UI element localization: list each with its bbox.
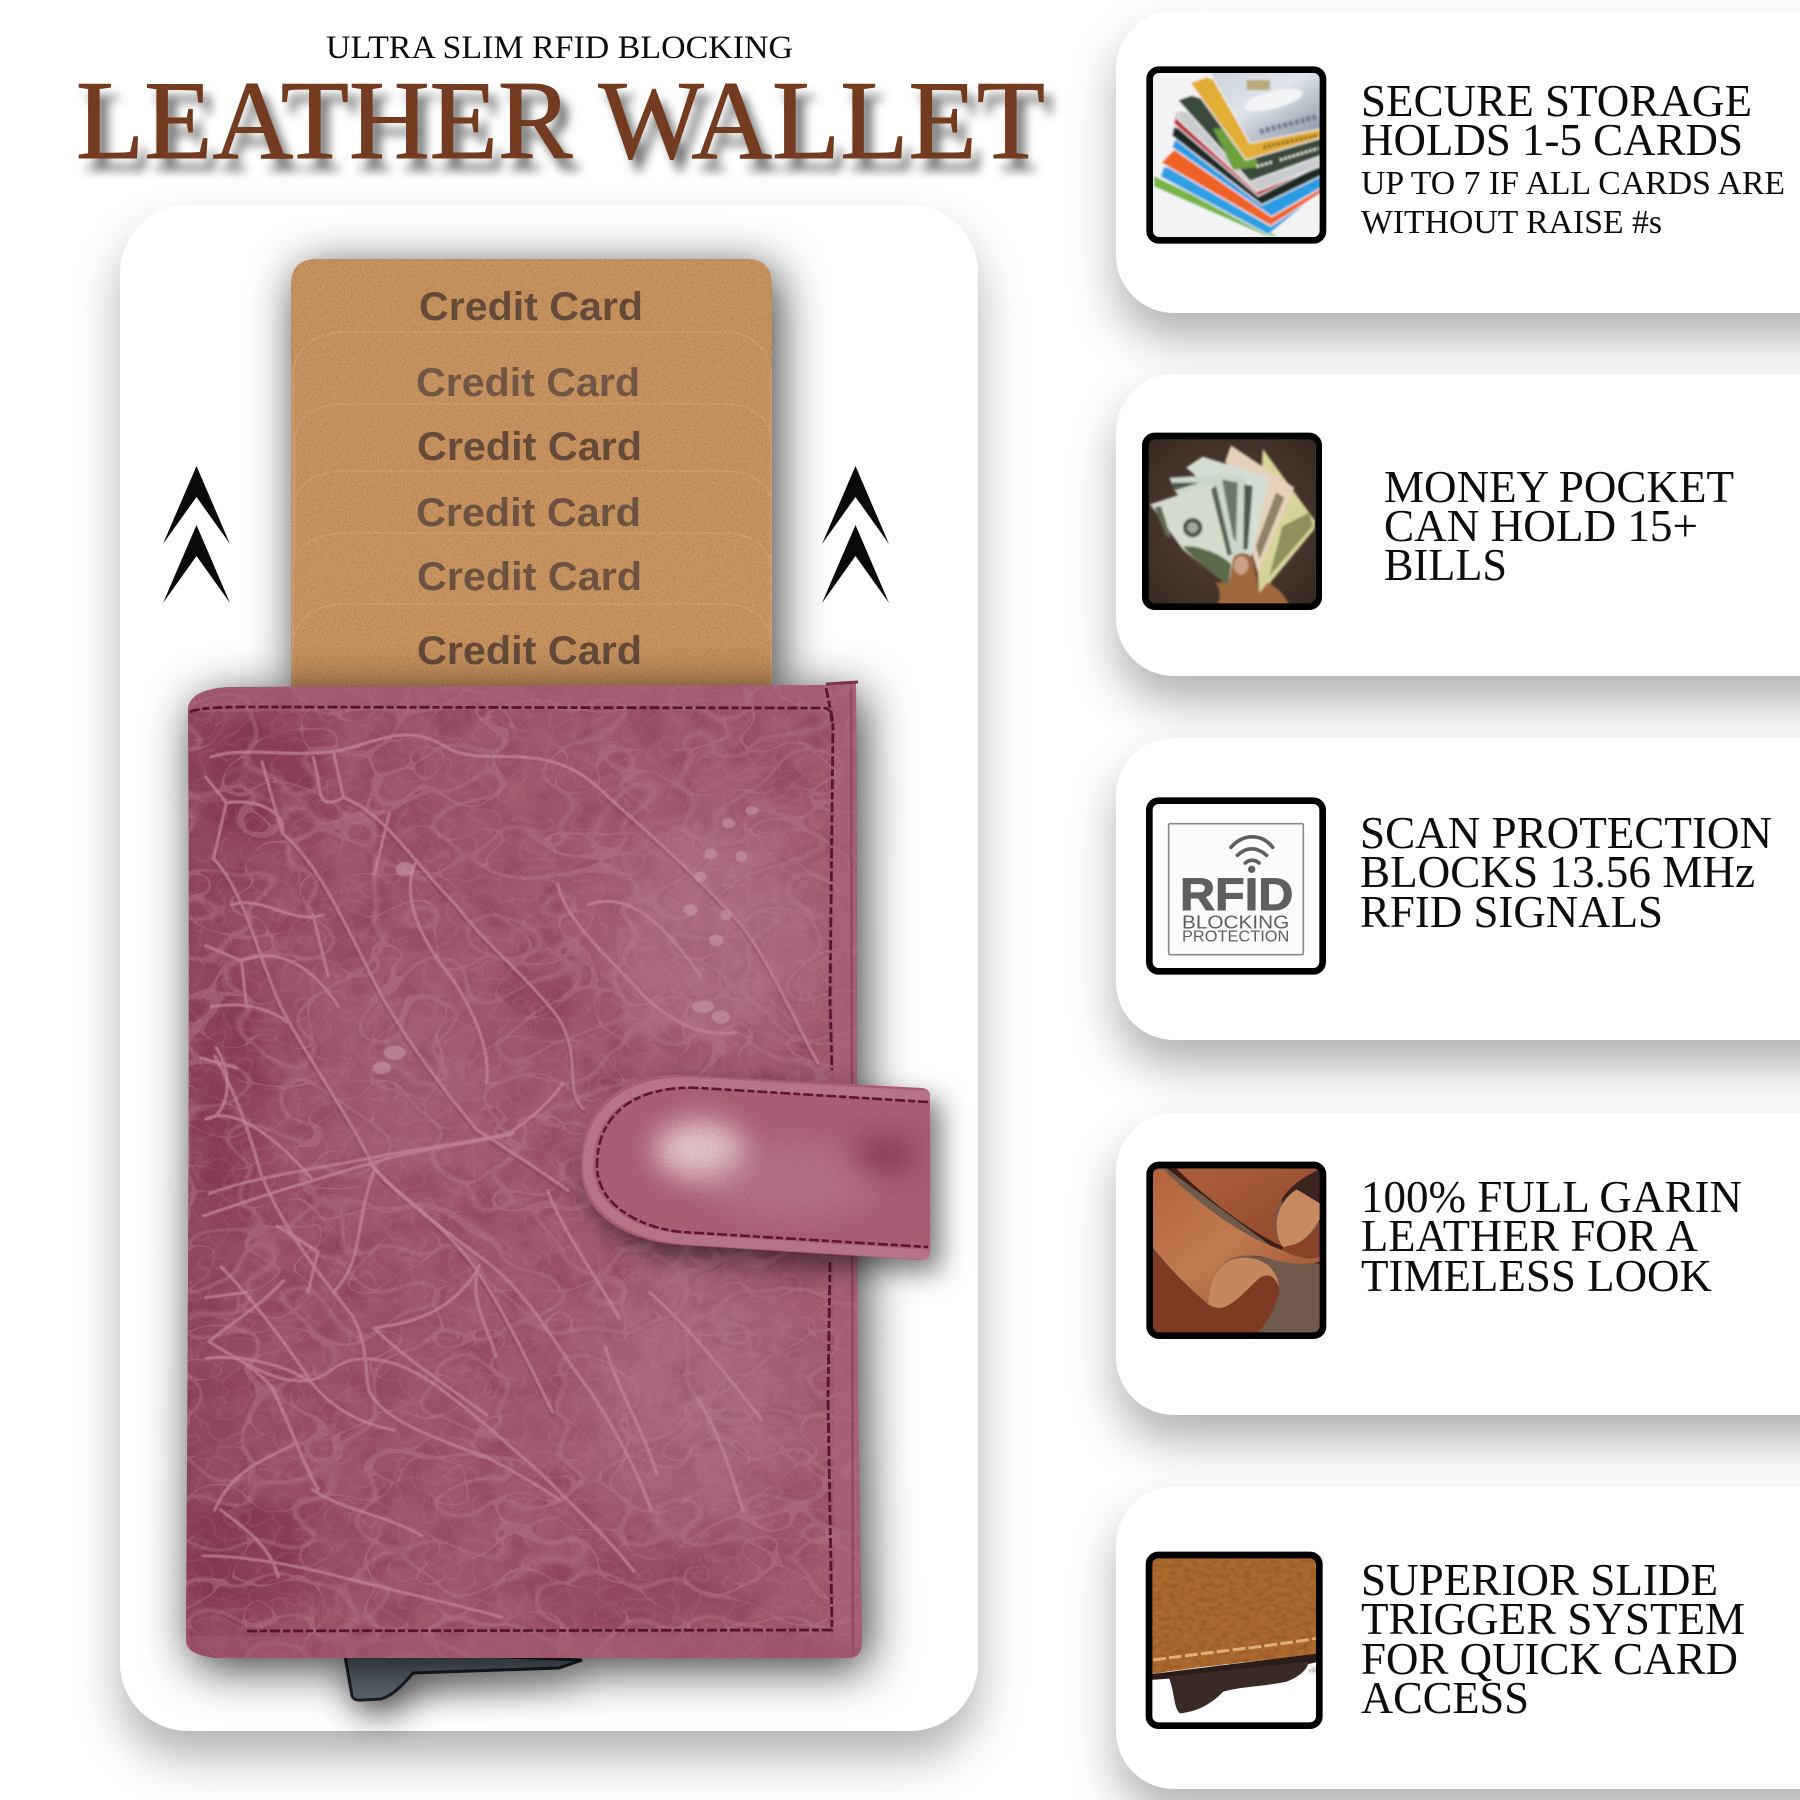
card label 1: Credit Card xyxy=(419,285,643,329)
feature text: money pocket: MONEY POCKET xyxy=(1384,461,1734,512)
card background xyxy=(1116,11,1800,313)
icon frame xyxy=(1150,1165,1323,1336)
panel: slide trigger xyxy=(1116,1487,1800,1789)
card label 6: Credit Card xyxy=(417,629,642,673)
icon frame xyxy=(1145,436,1319,607)
panel: full grain leather xyxy=(1116,1113,1800,1415)
feature text: scan protection: SCAN PROTECTION xyxy=(1360,807,1772,858)
subtitle: ultra slim rfid blocking: ULTRA SLIM RFID BLOCKING xyxy=(326,30,793,66)
panel background xyxy=(120,205,978,1731)
feature text: slide trigger xyxy=(1361,1554,1745,1723)
card label 2: Credit Card xyxy=(416,361,640,405)
icon: fanned dollar bills xyxy=(1145,436,1319,607)
card background xyxy=(1116,1487,1800,1789)
panel: money pocket xyxy=(1116,374,1800,676)
top edge strip xyxy=(188,684,860,712)
upper leather veins xyxy=(201,735,818,1430)
card label 3: Credit Card xyxy=(417,425,642,469)
feature text: money pocket xyxy=(1384,461,1734,590)
feature text: secure storage: HOLDS 1-5 CARDS xyxy=(1361,114,1743,165)
feature text: scan protection: RFID SIGNALS xyxy=(1360,886,1663,937)
panel: scan protection xyxy=(1116,738,1800,1040)
icon: credit card fan xyxy=(1150,70,1323,240)
card label 4: Credit Card xyxy=(416,491,641,535)
leather wallet body xyxy=(180,680,872,1668)
feature text: slide trigger: TRIGGER SYSTEM xyxy=(1361,1593,1745,1644)
feature text: slide trigger: FOR QUICK CARD xyxy=(1361,1633,1738,1684)
feature text: full grain leather: TIMELESS LOOK xyxy=(1361,1250,1712,1301)
feature text: money pocket: BILLS xyxy=(1384,539,1507,590)
right edge strip xyxy=(834,683,862,1650)
feature text: secure storage: WITHOUT RAISE #s xyxy=(1361,204,1662,241)
panel: secure storage xyxy=(1116,11,1800,313)
feature text: money pocket: CAN HOLD 15+ xyxy=(1384,500,1698,551)
stitching xyxy=(190,707,832,722)
bottom edge strip xyxy=(186,1636,862,1660)
heading: leather wallet: LEATHER WALLET xyxy=(76,59,1045,183)
feature text: full grain leather xyxy=(1361,1171,1742,1301)
lower leather veins xyxy=(203,1056,743,1617)
card background xyxy=(1116,374,1800,676)
card background xyxy=(1116,1113,1800,1415)
icon: rfid blocking badge: BLOCKING xyxy=(1182,911,1289,932)
stack of credit cards xyxy=(291,259,772,690)
card label 5: Credit Card xyxy=(417,555,642,599)
feature text: slide trigger: ACCESS xyxy=(1361,1672,1529,1723)
icon frame xyxy=(1149,1555,1319,1726)
panel: product photo xyxy=(120,205,978,1731)
arrows: right double chevron xyxy=(822,466,889,603)
icon: rfid blocking badge xyxy=(1149,801,1323,971)
icon: rfid blocking badge: PROTECTION xyxy=(1182,929,1289,946)
wallet clasp strap xyxy=(575,1065,935,1265)
title block xyxy=(76,30,1045,183)
feature text: full grain leather: LEATHER FOR A xyxy=(1361,1210,1698,1261)
card background xyxy=(1116,738,1800,1040)
icon: leather rolls xyxy=(1150,1165,1323,1336)
feature text: slide trigger: SUPERIOR SLIDE xyxy=(1361,1554,1718,1605)
feature text: secure storage: UP TO 7 IF ALL CARDS ARE xyxy=(1361,165,1785,202)
feature text: scan protection: BLOCKS 13.56 MHz xyxy=(1360,846,1755,897)
arrows: left double chevron xyxy=(163,466,230,603)
feature text: secure storage: SECURE STORAGE xyxy=(1361,75,1752,126)
icon: slide trigger closeup xyxy=(1149,1555,1319,1726)
feature text: full grain leather: 100% FULL GARIN xyxy=(1361,1171,1742,1222)
icon: rfid blocking badge: RFID xyxy=(1180,869,1293,920)
icon frame xyxy=(1150,70,1323,240)
wifi signal arcs xyxy=(1231,837,1273,863)
slide trigger tongue xyxy=(344,1650,582,1700)
feature text: secure storage xyxy=(1361,75,1785,241)
feature text: scan protection xyxy=(1360,807,1772,937)
